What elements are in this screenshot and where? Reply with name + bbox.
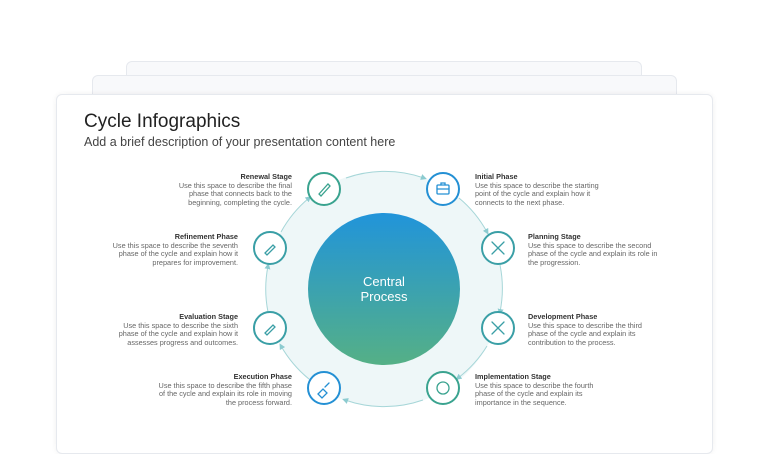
middle card (92, 75, 677, 135)
back card (126, 61, 642, 121)
icons (254, 173, 514, 404)
arrows (266, 171, 502, 407)
main card (56, 94, 713, 454)
text: development: Development Phase (528, 312, 597, 321)
text: planning: Planning Stage (528, 232, 581, 241)
text: execution: Use this space to describe the fifth phase of the cycle and explain its role in moving the process forward. (159, 381, 292, 407)
text: execution: Execution Phase (234, 372, 292, 381)
text: initial: Initial Phase (475, 172, 518, 181)
text: refinement: Use this space to describe the seventh phase of the cycle and explain how it prepares for improvement. (113, 241, 238, 267)
text: evaluation: Evaluation Stage (179, 312, 238, 321)
central circle: Central (363, 274, 405, 289)
text: renewal: Renewal Stage (240, 172, 292, 181)
text: implementation: Use this space to describe the fourth phase of the cycle and explain its importance in the sequence. (475, 381, 593, 407)
text: planning: Use this space to describe the second phase of the cycle and explain its role in the progression. (528, 241, 657, 267)
text: initial: Use this space to describe the starting point of the cycle and explain how it connects to the next phase. (475, 181, 599, 207)
text: implementation: Implementation Stage (475, 372, 551, 381)
text: refinement: Refinement Phase (175, 232, 238, 241)
text: renewal: Use this space to describe the final phase that connects back to the beginning, completing the cycle. (179, 181, 292, 207)
subtitle: Add a brief description of your presentation content here (84, 135, 395, 149)
title: Cycle Infographics (84, 111, 240, 132)
central circle: Process (361, 289, 408, 304)
central circle (308, 213, 460, 365)
text: evaluation: Use this space to describe the sixth phase of the cycle and explain how it assesses progress and outcomes. (119, 321, 238, 347)
text: development: Use this space to describe the third phase of the cycle and explain its contribution to the process. (528, 321, 642, 347)
